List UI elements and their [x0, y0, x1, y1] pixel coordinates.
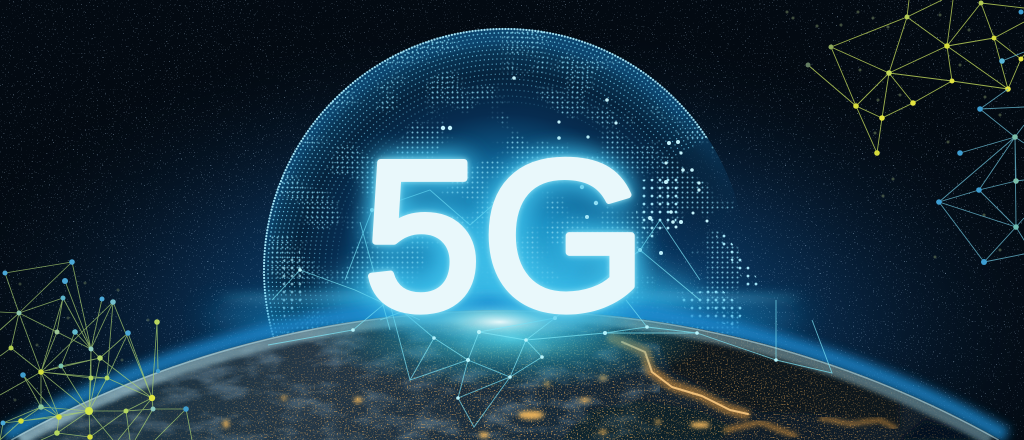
mesh nodes — [298, 208, 778, 400]
dotted globe — [263, 28, 762, 340]
planet earth — [10, 310, 1000, 440]
5G headline: 5G — [363, 117, 647, 355]
coastline lights — [612, 338, 895, 436]
network: right blue constellation — [936, 10, 1024, 265]
blue links — [939, 52, 1024, 262]
yellow faint dots — [786, 10, 1002, 258]
city glow spots — [223, 376, 710, 438]
globe scattered large dots — [441, 76, 708, 255]
left links — [0, 262, 192, 440]
network: top right yellow constellation — [786, 0, 1024, 258]
city lights scatter — [10, 317, 1000, 440]
dark ocean — [560, 326, 985, 440]
yellow links — [808, 0, 1024, 153]
globe body — [263, 28, 747, 340]
atmosphere rim — [20, 315, 990, 440]
yellow nodes — [806, 0, 1024, 156]
left faint dots — [14, 282, 150, 402]
centre horizon glow — [360, 292, 640, 352]
earth teal glow — [330, 310, 696, 386]
atmosphere outer glow — [4, 304, 1006, 436]
earth clouds — [20, 318, 660, 440]
globe outer dot bands — [678, 232, 762, 326]
network mesh over globe and earth — [268, 190, 832, 427]
globe dotted shell — [264, 29, 746, 340]
network: bottom left constellation — [0, 259, 192, 440]
blue nodes — [936, 10, 1024, 265]
horizon light streak — [205, 259, 805, 331]
globe continents — [270, 30, 740, 340]
earth surface — [10, 310, 1000, 440]
left nodes — [0, 259, 189, 440]
